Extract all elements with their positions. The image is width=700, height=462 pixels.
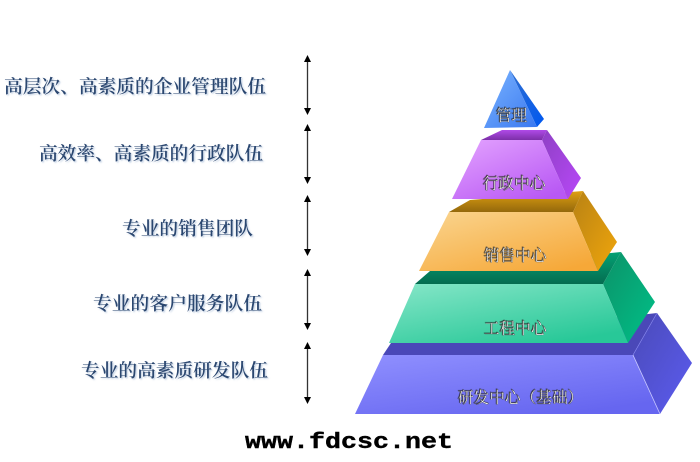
label: administration center: 行政中心 xyxy=(483,175,547,193)
layer: sales center xyxy=(419,191,617,271)
footer url: www.fdcsc.net xyxy=(245,430,453,455)
text: administration team: 高效率、高素质的行政队伍 xyxy=(39,144,263,165)
label: management: 管理 xyxy=(496,107,528,125)
arrow: administration xyxy=(304,124,311,184)
layer: administration center xyxy=(452,130,581,199)
arrow: research xyxy=(304,342,311,404)
label: engineering center: 工程中心 xyxy=(484,320,548,338)
arrow: sales xyxy=(304,195,311,256)
label: research center: 研发中心（基础） xyxy=(458,389,584,407)
label: sales center: 销售中心 xyxy=(484,247,548,265)
arrow: management xyxy=(304,55,311,115)
text: customer service team: 专业的客户服务队伍 xyxy=(93,294,262,315)
text: management team: 高层次、高素质的企业管理队伍 xyxy=(4,77,266,98)
text: research team: 专业的高素质研发队伍 xyxy=(81,361,268,382)
arrow: customer service xyxy=(304,269,311,330)
layer: management apex xyxy=(484,70,544,128)
layer: engineering center xyxy=(389,252,655,343)
layer: research center base xyxy=(355,313,692,414)
text: sales team: 专业的销售团队 xyxy=(122,218,253,240)
